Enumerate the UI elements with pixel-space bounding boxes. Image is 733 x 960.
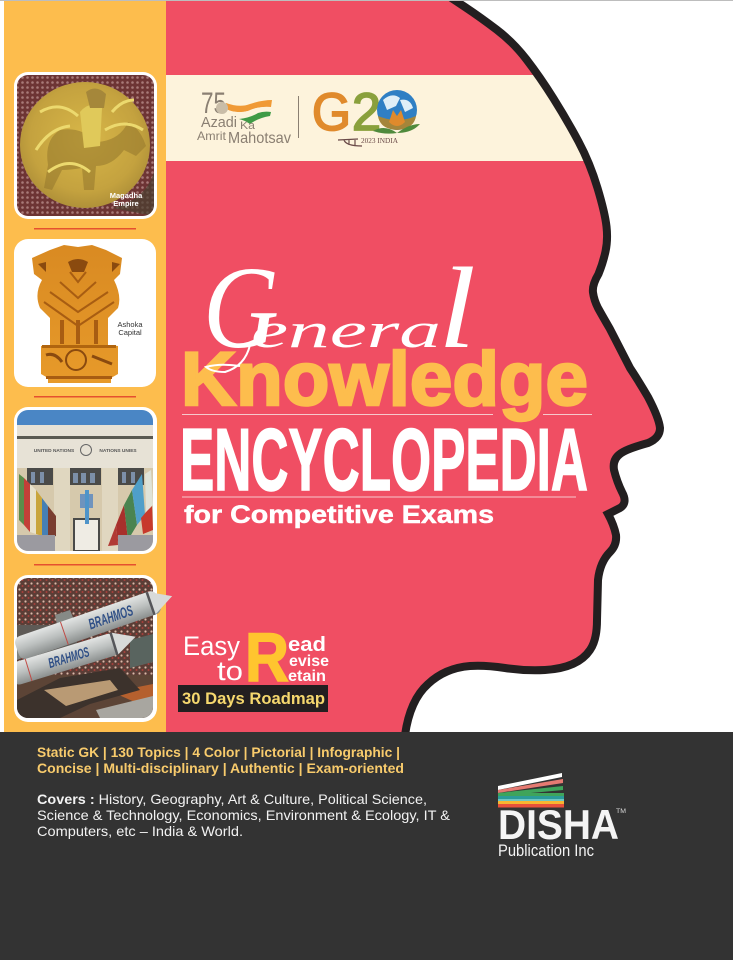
covers text: Covers : History, Geography, Art & Culture, Political Science, [37,791,427,807]
subtitle: for Competitive Exams [184,501,494,529]
badge: Easy to Read Revise Retain: etain [288,668,326,685]
panel: red head silhouette [166,0,666,735]
feature list: Concise | Multi-disciplinary | Authentic | Exam-oriented [37,760,404,776]
separator [34,228,136,230]
logo: Azadi Ka Amrit Mahotsav: Azadi [201,114,237,131]
title: General [203,242,476,373]
separator [34,564,136,566]
label: 30 Days Roadmap: 30 Days Roadmap [182,689,325,708]
logo: G20 [312,83,420,146]
photo card: BrahMos missiles: BRAHMOS [46,643,91,671]
title: General: G [203,242,279,373]
edge lines [0,0,733,2]
covers text [37,791,451,839]
logo: Disha Publication: DISHA [498,801,619,848]
title: Knowledge: Knowledge [181,337,588,422]
covers text: Computers, etc – India & World. [37,823,243,839]
title: General: l [438,245,476,373]
badge: Easy to Read Revise Retain [183,619,329,696]
rule below Encyclopedia [182,496,576,498]
photo card: Magadha Empire coin [14,72,157,219]
panel: yellow image strip [4,0,166,732]
photo card: BrahMos missiles: BRAHMOS [86,602,135,633]
photo card: United Nations building: UNITED NATIONS [34,448,75,454]
photo card: Magadha Empire coin: Magadha [110,191,143,200]
feature list [37,744,404,776]
divider between logos [298,96,299,138]
label: 30 Days Roadmap [178,685,328,712]
photo card: United Nations building [14,407,157,554]
photo card: BrahMos missiles [8,575,176,722]
logo: G20: 2023 INDIA [361,136,399,145]
photo card: Ashoka Capital: Capital [118,328,142,337]
rule above Encyclopedia [182,414,592,416]
badge: Easy to Read Revise Retain: R [245,619,289,696]
logo: Azadi Ka Amrit Mahotsav: Mahotsav [228,130,291,147]
title: General: enera [251,302,441,358]
logo: G20: G [312,83,351,142]
badge: Easy to Read Revise Retain: ead [288,634,326,656]
logo: Azadi Ka Amrit Mahotsav: Ka [240,120,256,132]
logo: Disha Publication [498,773,626,860]
General G tail [206,345,250,372]
logo: Disha Publication: TM [616,809,626,815]
badge: Easy to Read Revise Retain: to [217,656,243,686]
logo: Azadi Ka Amrit Mahotsav: Amrit [197,129,227,143]
photo card: Ashoka Capital [14,239,156,387]
logo: Azadi Ka Amrit Mahotsav: 75 [201,87,226,120]
panel: dark footer [0,732,733,960]
badge: Easy to Read Revise Retain: Easy [183,631,240,661]
feature list: Static GK | 130 Topics | 4 Color | Pictorial | Infographic | [37,744,400,760]
badge: Easy to Read Revise Retain: evise [289,653,329,670]
logo: G20: 2 [352,83,381,142]
separator [34,396,136,398]
photo card: Ashoka Capital: Ashoka [117,320,143,329]
covers text: Science & Technology, Economics, Environment & Ecology, IT & [37,807,451,823]
photo card: United Nations building: NATIONS UNIES [99,448,137,454]
logo: Disha Publication: Publication Inc [498,841,594,860]
logo: Azadi Ka Amrit Mahotsav [197,87,291,147]
photo card: Magadha Empire coin: Empire [113,199,139,208]
